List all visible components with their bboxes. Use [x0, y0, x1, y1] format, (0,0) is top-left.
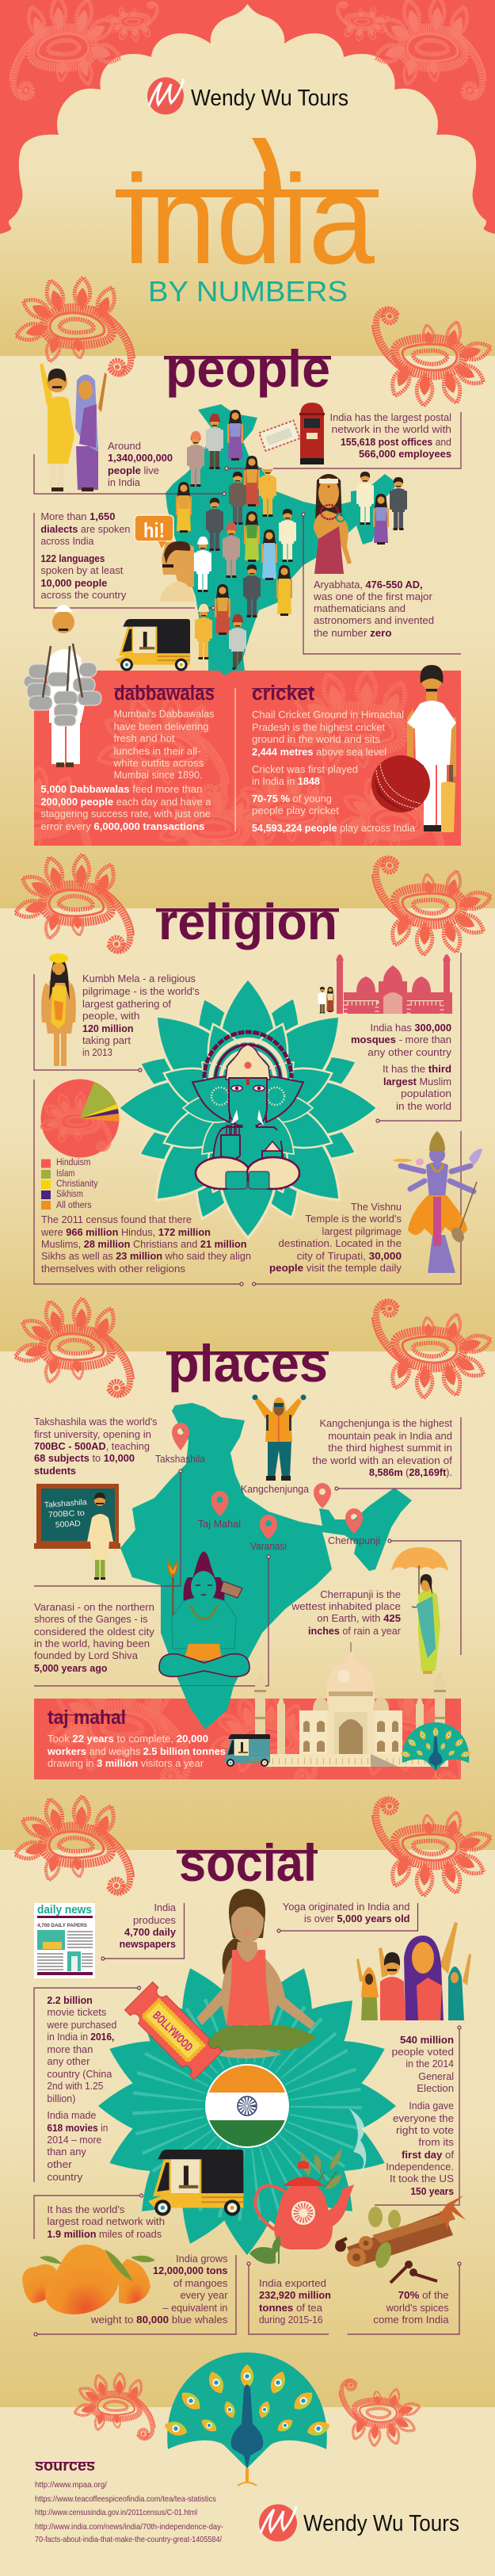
legend: All others: [56, 1201, 92, 1210]
rickshaw small: [223, 1734, 270, 1767]
text: movies: were purchased: [46, 2019, 116, 2031]
sources list: http://www.mpaa.org/: [35, 2480, 107, 2490]
text: dabbawalas: 5,000 Dabbawalas feed more than: [40, 783, 202, 795]
text: census: were 966 million Hindus, 172 million: [40, 1226, 211, 1238]
text: Aryabhata: [313, 579, 434, 639]
text: voting: 150 years: [410, 2185, 454, 2197]
text: Vishnu: people visit the temple daily: [269, 1262, 402, 1274]
text: spices: come from India: [373, 2314, 449, 2326]
legend: [41, 1158, 98, 1210]
text: Vishnu: The Vishnu: [351, 1201, 402, 1213]
illustration: Taj Mahal: [254, 1642, 448, 1767]
legend: Islam: [56, 1169, 74, 1179]
text: cricket: Pradesh is the highest cricket: [252, 721, 385, 733]
text: tea: tonnes of tea: [259, 2302, 323, 2314]
text: census: [40, 1213, 251, 1275]
text: cricket: Cricket was first played: [252, 763, 358, 775]
logo bottom: [259, 2505, 459, 2541]
text: Aryabhata: astronomers and invented: [314, 614, 434, 626]
text: tea: 232,920 million: [259, 2289, 331, 2301]
text: dialects: 122 languages: [40, 552, 105, 564]
header faint paisleys: [10, 0, 486, 97]
rickshaw people: [116, 619, 190, 671]
logo top: [147, 78, 348, 114]
heading: sources: sources: [35, 2457, 95, 2475]
text: dabbawalas: have been delivering: [114, 720, 209, 732]
text: taj mahal: Took 22 years to complete, 20,000: [48, 1733, 208, 1745]
text: census: Sikhs as well as 23 million who said they align: [41, 1250, 251, 1262]
text: Cherrapunji: inches of rain a year: [308, 1625, 402, 1637]
text: cricket: ground in the world and sits: [252, 733, 381, 745]
sources list: http://www.india.com/news/india/70th-independence-day-: [35, 2522, 223, 2532]
text: voting: in the 2014: [406, 2058, 454, 2070]
text: yoga: Yoga originated in India and: [283, 1901, 410, 1913]
text: Varanasi: founded by Lord Shiva: [34, 1649, 139, 1661]
text: dabbawalas: 200,000 people each day and have a: [40, 796, 211, 808]
text: tea: [259, 2277, 331, 2326]
text: Kumbh Mela: largest gathering of: [82, 998, 171, 1010]
text: population: Around: [108, 440, 141, 452]
heading: social: social: [179, 1833, 317, 1892]
text: roads: largest road network with: [47, 2215, 165, 2227]
text: tea: India exported: [259, 2277, 326, 2289]
text: Kumbh Mela: people, with: [82, 1010, 139, 1022]
text: Kangchenjunga: 8,586m (28,169ft).: [369, 1466, 452, 1478]
text: dabbawalas: lunches in their all-: [114, 745, 201, 757]
text: Aryabhata: the number zero: [314, 627, 392, 639]
map labels: Taj Mahal: [198, 1518, 241, 1530]
text: postal: 566,000 employees: [359, 448, 451, 460]
teapot with leaves: [249, 2108, 366, 2264]
pie chart: [40, 1080, 119, 1157]
text: mosques: It has the third: [383, 1063, 451, 1075]
text: Vishnu: [269, 1201, 402, 1274]
text: yoga: [283, 1901, 410, 1924]
icon: cricket ball: [371, 755, 430, 812]
text: postal: [329, 411, 451, 460]
text: mosques: [351, 1022, 452, 1112]
text: census: themselves with other religions: [41, 1263, 186, 1275]
paisley religion pair: [13, 854, 493, 955]
figure: dabbawala: [24, 605, 101, 767]
large couple: [40, 363, 107, 491]
flower social: [52, 1911, 442, 2301]
lotus mandala: [94, 953, 402, 1263]
heading: cricket: cricket: [252, 681, 314, 705]
callout lines people: [34, 412, 461, 654]
text: voting: from its: [418, 2136, 455, 2148]
text: mangoes: of mangoes: [173, 2277, 228, 2289]
text: Takshashila: 68 subjects to 10,000: [34, 1452, 135, 1464]
text: cricket: 2,444 metres above sea level: [252, 746, 386, 758]
text: Kangchenjunga: Kangchenjunga is the highest: [320, 1417, 452, 1429]
panel: taj mahal: [34, 1686, 461, 1779]
text: dabbawalas: [40, 708, 215, 832]
sources list: [35, 2480, 223, 2544]
figure: climber: [252, 1395, 306, 1481]
text: cricket: Chail Cricket Ground in Himachal: [252, 709, 404, 720]
text: Aryabhata: was one of the first major: [313, 590, 433, 602]
paisley social pair: [13, 1796, 493, 1896]
text: newspapers: 4,700 daily: [124, 1926, 177, 1938]
text: Kangchenjunga: mountain peak in India and: [328, 1430, 452, 1442]
text: Kangchenjunga: the third highest summit in: [328, 1442, 452, 1454]
text: taj mahal: drawing in 3 million visitors a year: [48, 1757, 204, 1769]
text: cricket: 54,593,224 people play across India: [252, 822, 416, 834]
text: Varanasi: in the world, having been: [34, 1638, 150, 1649]
text: Kumbh Mela: [82, 973, 200, 1058]
spices: [335, 2196, 466, 2283]
icon: hi bubble and face: [135, 515, 195, 602]
legend: Christianity: [56, 1179, 98, 1189]
text: Takshashila: Takshashila was the world's: [34, 1416, 158, 1428]
text: movies: movie tickets: [47, 2006, 107, 2018]
newspaper: daily news: [37, 1903, 92, 1917]
text: census: Muslims, 28 million Christians and 21 million: [41, 1238, 247, 1250]
text: Kangchenjunga: [312, 1417, 452, 1478]
text: voting: right to vote: [396, 2124, 454, 2136]
text: taj mahal: [47, 1733, 226, 1769]
text: voting: people voted: [391, 2046, 454, 2058]
text: Vishnu: city of Tirupati, 30,000: [297, 1250, 402, 1262]
map labels: Kangchenjunga: [241, 1483, 310, 1495]
text: dialects: More than 1,650: [40, 510, 115, 522]
text: Varanasi: [34, 1601, 155, 1674]
text: mosques: mosques - more than: [351, 1034, 451, 1045]
text: Kumbh Mela: pilgrimage - is the world's: [82, 985, 200, 997]
text: newspapers: India: [154, 1901, 177, 1913]
text: voting: India gave: [409, 2100, 454, 2112]
text: movies: more than: [47, 2043, 93, 2055]
text: dabbawalas: error every 6,000,000 transactions: [40, 820, 204, 832]
blackboard and teacher: 700BC to: [48, 1509, 86, 1519]
heading: taj mahal: taj mahal: [48, 1707, 126, 1729]
text: mosques: India has 300,000: [371, 1022, 451, 1034]
text: movies: in India in 2016,: [47, 2031, 114, 2043]
sources list: https://www.teacoffeespiceofindia.com/tea/tea-statistics: [35, 2494, 216, 2504]
text: movies: 2014 – more: [47, 2134, 101, 2146]
text: movies: India made: [47, 2109, 96, 2121]
voters: [356, 1922, 471, 2020]
figure: yoga woman: [196, 1889, 316, 2058]
map pins: [172, 1423, 363, 1539]
text: Kangchenjunga: the world with an elevation of: [312, 1454, 452, 1466]
panel: dabbawalas and cricket: [34, 658, 461, 846]
blackboard and teacher: 500AD: [55, 1519, 81, 1530]
text: dabbawalas: Mumbai since 1890.: [114, 769, 203, 781]
text: movies: than any: [47, 2146, 86, 2157]
text: Kumbh Mela: Kumbh Mela - a religious: [82, 973, 196, 984]
map labels: Cherrapunji: [328, 1535, 380, 1546]
text: voting: It took the US: [390, 2173, 454, 2184]
figure: sadhu: [41, 954, 76, 1066]
callout lines social: [34, 1903, 461, 2336]
text: Takshashila: 700BC - 500AD, teaching: [34, 1440, 150, 1452]
text: spices: 70% of the: [398, 2289, 449, 2301]
text: Aryabhata: mathematicians and: [314, 602, 406, 614]
callout lines places: [34, 1417, 461, 1686]
text: mangoes: – equivalent in: [163, 2302, 228, 2314]
text: cricket: people play cricket: [252, 805, 339, 816]
rickshaw large: [148, 2150, 243, 2216]
text: newspapers: produces: [133, 1914, 176, 1926]
text: Varanasi: shores of the Ganges - is: [34, 1613, 148, 1625]
logo top: Wendy Wu Tours: [191, 86, 348, 111]
text: dabbawalas: fresh and hot: [114, 732, 175, 744]
text: mangoes: India grows: [176, 2253, 228, 2265]
text: Cherrapunji: Cherrapunji is the: [320, 1588, 401, 1600]
text: voting: [386, 2034, 455, 2197]
newspaper: [34, 1903, 95, 1978]
text: Cherrapunji: wettest inhabited place: [291, 1600, 401, 1612]
text: dialects: dialects are spoken: [40, 523, 130, 535]
text: postal: 155,618 post offices and: [341, 436, 451, 448]
post box and letter: [259, 403, 325, 464]
text: voting: General: [418, 2070, 454, 2082]
text: roads: It has the world's: [47, 2203, 125, 2215]
sources list: http://www.censusindia.gov.in/2011census/C-01.html: [35, 2508, 197, 2517]
text: population: in India: [108, 476, 141, 488]
blackboard and teacher: Takshashila: [44, 1498, 88, 1510]
icon: mosque: [318, 954, 452, 1014]
text: movies: any other: [47, 2055, 90, 2067]
text: Takshashila: students: [34, 1465, 76, 1477]
text: dabbawalas: Mumbai's Dabbawalas: [114, 708, 215, 720]
text: population: [108, 440, 173, 488]
map tip over taj panel: [181, 1686, 234, 1729]
peacock large: [162, 2352, 332, 2486]
text: Vishnu: Temple is the world's: [305, 1213, 402, 1225]
text: voting: Independence.: [386, 2161, 454, 2173]
map labels: Varanasi: [250, 1540, 287, 1552]
sources list: 70-facts-about-india-that-make-the-country-great-1405584/: [35, 2535, 222, 2544]
text: Aryabhata: Aryabhata, 476-550 AD,: [314, 579, 423, 590]
text: movies: 2.2 billion: [47, 1994, 93, 2006]
text: mosques: population: [401, 1087, 451, 1099]
text: Kumbh Mela: in 2013: [82, 1046, 112, 1058]
text: newspapers: [120, 1901, 177, 1950]
flag: [205, 2064, 289, 2148]
text: Varanasi: 5,000 years ago: [34, 1662, 108, 1674]
mangoes: [22, 2245, 155, 2314]
logo bottom: Wendy Wu Tours: [303, 2511, 459, 2536]
figure: Aryabhata: [314, 474, 352, 574]
legend: Hinduism: [56, 1158, 90, 1168]
text: cricket: in India in 1848: [252, 775, 320, 787]
text: population: 1,340,000,000: [108, 452, 173, 464]
map: India places: [120, 1403, 412, 1729]
figure: Vishnu: [393, 1131, 482, 1273]
callout lines religion: [34, 953, 461, 1286]
peacock small: [400, 1722, 471, 1779]
text: dialects: [40, 510, 130, 601]
text: taj mahal: workers and weighs 2.5 billion tonnes: [47, 1745, 226, 1757]
text: mangoes: every year: [181, 2289, 228, 2301]
text: cricket: 70-75 % of young: [252, 793, 332, 805]
text: mosques: in the world: [396, 1100, 451, 1112]
paisley bottom pair: [73, 2373, 421, 2446]
text: movies: other: [47, 2158, 73, 2170]
figure: Shiva: [159, 1552, 249, 1676]
text: dabbawalas: white outfits across: [112, 757, 204, 769]
text: Vishnu: largest pilgrimage: [322, 1225, 402, 1237]
ticket: [124, 1982, 223, 2080]
ticket: BOLLYWOOD: [150, 2008, 196, 2054]
text: Cherrapunji: on Earth, with 425: [317, 1612, 401, 1624]
text: Cherrapunji: [291, 1588, 402, 1637]
legend: Sikhism: [56, 1190, 83, 1199]
blackboard and teacher: [34, 1484, 120, 1580]
text: voting: first day of: [402, 2149, 454, 2161]
heading: religion: religion: [158, 893, 337, 950]
text: movies: [46, 1994, 116, 2183]
text: mangoes: [90, 2253, 228, 2326]
text: roads: [47, 2203, 165, 2240]
text: movies: billion): [47, 2093, 75, 2104]
newspaper: 4,700 DAILY PAPERS: [37, 1923, 88, 1928]
text: Vishnu: destination. Located in the: [279, 1237, 402, 1249]
text: dabbawalas: staggering success rate, with just one: [40, 808, 211, 820]
text: movies: country (China: [47, 2068, 112, 2080]
people on map: [176, 410, 407, 670]
icon: hi bubble and face: hi!: [143, 518, 165, 542]
title: india: india: [124, 148, 375, 290]
text: mangoes: 12,000,000 tons: [153, 2265, 228, 2276]
text: cricket: [252, 709, 416, 834]
text: voting: everyone the: [393, 2112, 454, 2124]
text: voting: Election: [417, 2082, 454, 2094]
text: dialects: across the country: [40, 589, 127, 601]
text: dialects: spoken by at least: [40, 564, 124, 576]
text: roads: 1.9 million miles of roads: [47, 2228, 162, 2240]
text: mosques: largest Muslim: [383, 1076, 451, 1087]
text: mangoes: weight to 80,000 blue whales: [90, 2314, 228, 2326]
figure: Ganesha: [192, 1032, 303, 1189]
subtitle: BY NUMBERS: [148, 275, 348, 308]
text: spices: world's spices: [386, 2302, 449, 2314]
text: movies: 2nd with 1.25: [47, 2080, 103, 2092]
text: census: The 2011 census found that there: [41, 1213, 192, 1225]
figure: cricketer: [407, 665, 456, 832]
text: Kumbh Mela: 120 million: [82, 1022, 134, 1034]
text: population: people live: [108, 464, 159, 476]
text: voting: 540 million: [400, 2034, 454, 2046]
figure: woman with umbrella: [391, 1547, 448, 1674]
text: tea: during 2015-16: [259, 2314, 323, 2326]
text: mosques: any other country: [367, 1046, 452, 1058]
heading: dabbawalas: dabbawalas: [114, 681, 215, 705]
text: Kumbh Mela: taking part: [82, 1034, 131, 1046]
text: Varanasi: Varanasi - on the northern: [34, 1601, 154, 1613]
heading: people: people: [166, 339, 330, 398]
text: movies: country: [47, 2171, 83, 2183]
text: Takshashila: first university, opening in: [34, 1428, 151, 1440]
map labels: Takshashila: [155, 1453, 206, 1465]
map labels: [155, 1453, 380, 1552]
map: India people: [166, 404, 398, 675]
heading: places: places: [168, 1334, 328, 1393]
text: Varanasi: considered the oldest city: [34, 1626, 155, 1638]
text: postal: India has the largest postal: [329, 411, 451, 423]
text: movies: 618 movies in: [47, 2122, 108, 2134]
map tip over panel: [208, 658, 245, 675]
text: postal: network in the world with: [331, 423, 451, 435]
text: spices: [373, 2289, 449, 2326]
text: Takshashila: [34, 1416, 158, 1477]
text: dialects: across India: [40, 535, 94, 547]
paisley header pair: [14, 277, 493, 406]
text: newspapers: newspapers: [120, 1938, 176, 1950]
text: yoga: is over 5,000 years old: [304, 1913, 410, 1924]
text: dialects: 10,000 people: [40, 577, 107, 589]
header arch: [0, 0, 495, 234]
paisley places pair: [13, 1298, 493, 1398]
